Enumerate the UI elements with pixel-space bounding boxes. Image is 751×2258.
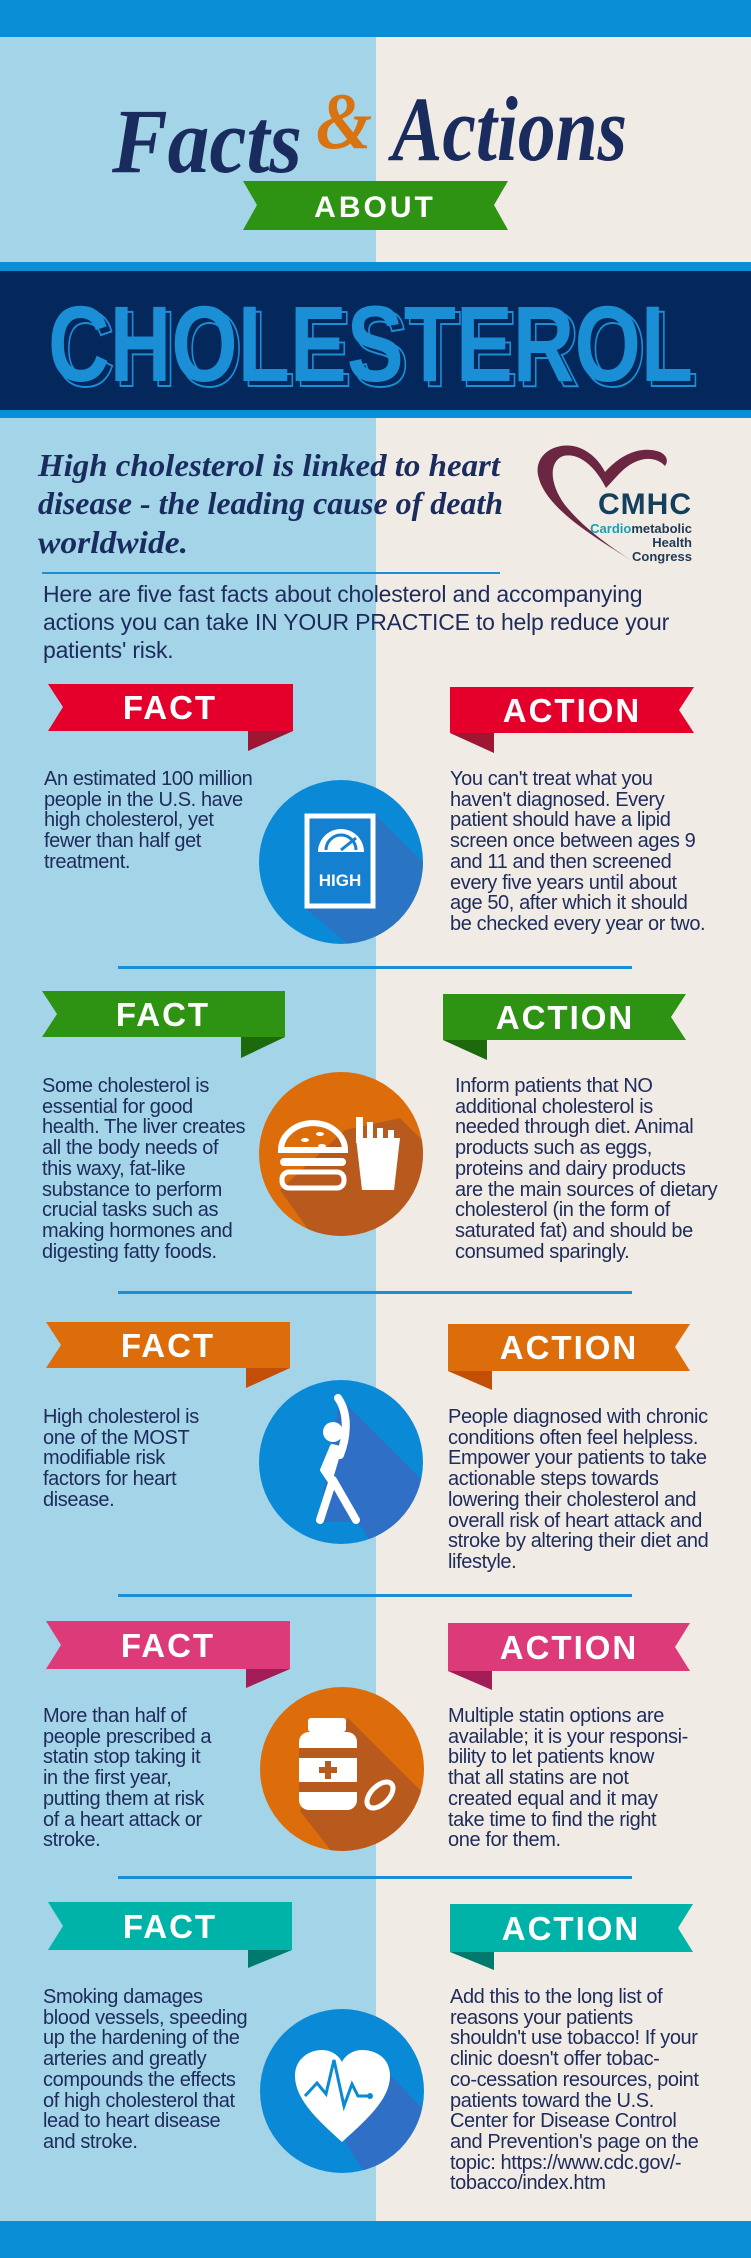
banners section 3 [46,1322,290,1388]
banners section 5: FACT [123,1908,217,1945]
action 4 text: Multiple statin options are [448,1705,664,1727]
about banner: ABOUT [314,191,436,224]
action 5 text: topic: https://www.cdc.gov/- [450,2152,681,2174]
action 5 text: clinic doesn't offer tobac- [450,2048,659,2070]
action 1 text: patient should have a lipid [450,809,670,831]
fact 2 text: this waxy, fat-like [42,1158,185,1180]
text: ACTION [496,999,634,1036]
fact 5 text: Smoking damages [43,1986,203,2008]
banners section 4 [46,1621,290,1688]
text: ACTION [502,1910,640,1947]
title: Facts [111,90,302,192]
fact 5 text: of high cholesterol that [43,2090,235,2112]
banners section 4: FACT [121,1627,215,1664]
fact 4 text: statin stop taking it [43,1746,200,1768]
tagline: worldwide. [38,524,188,560]
fact 4 text [43,1705,212,1851]
fact 1 text: treatment. [44,851,130,873]
dividers [118,966,632,1879]
action 2 text: saturated fat) and should be [455,1220,693,1242]
fact 3 text: disease. [43,1489,114,1511]
about banner [243,181,508,230]
fact 3 text: one of the MOST [43,1427,189,1449]
action 5 text: Center for Disease Control [450,2110,676,2132]
title: Actions [388,78,627,180]
action 4 text: bility to let patients know [448,1746,654,1768]
action 3 text: conditions often feel helpless. [448,1427,698,1449]
banners section 2: FACT [116,996,210,1033]
fact 4 text: of a heart attack or [43,1809,202,1831]
text: ACTION [500,1629,638,1666]
action 2 text: needed through diet. Animal [455,1116,693,1138]
action 2 text: cholesterol (in the form of [455,1199,670,1221]
action 1 text: and 11 and then screened [450,851,671,873]
tagline: High cholesterol is linked to heart [37,447,501,483]
fact 5 text: compounds the effects [43,2069,235,2091]
action 4 text: created equal and it may [448,1788,657,1810]
fact 3 text: High cholesterol is [43,1406,199,1428]
action 4 text: one for them. [448,1829,561,1851]
icon: stretching person [259,1380,423,1544]
icon: burger and fries [259,1072,423,1236]
action 1 text: be checked every year or two. [450,913,705,935]
fact 2 text [42,1075,245,1263]
fact 5 text: arteries and greatly [43,2048,206,2070]
fact 5 text: up the hardening of the [43,2027,240,2049]
title: & [316,78,372,166]
fact 1 text: fewer than half get [44,830,201,852]
intro text: Here are five fast facts about cholesterol and accompanying [43,581,642,607]
fact 2 text: essential for good [42,1096,193,1118]
fact 4 text: More than half of [43,1705,186,1727]
action 5 text: shouldn't use tobacco! If your [450,2027,698,2049]
text: ACTION [503,692,641,729]
action 5 text: tobacco/index.htm [450,2172,606,2194]
action 5 text: patients toward the U.S. [450,2090,654,2112]
fact 2 text: all the body needs of [42,1137,218,1159]
banners section 1 [48,684,293,751]
icon: pill bottle [260,1687,424,1851]
action 5 text: co-cessation resources, point [450,2069,699,2091]
title [111,78,627,192]
action 2 text: products such as eggs, [455,1137,652,1159]
action 1 text: age 50, after which it should [450,892,687,914]
banners section 2 [42,991,285,1058]
logo [538,446,692,566]
tagline [37,447,503,560]
icon: heart ecg [260,2009,424,2173]
action 4 text: available; it is your responsi- [448,1726,688,1748]
fact 1 text: high cholesterol, yet [44,809,213,831]
action 5 text [450,1986,699,2194]
action 3 text: People diagnosed with chronic [448,1406,708,1428]
text: ACTION [500,1329,638,1366]
action 3 text [448,1406,708,1573]
banners section 5 [48,1902,292,1968]
action 5 text: reasons your patients [450,2007,633,2029]
action 5 text: Add this to the long list of [450,1986,662,2008]
fact 4 text: putting them at risk [43,1788,204,1810]
action 4 text: that all statins are not [448,1767,629,1789]
action 1 text: every five years until about [450,872,677,894]
fact 1 text [44,768,252,873]
logo: Congress [632,549,692,564]
tagline: disease - the leading cause of death [38,485,503,521]
banners section 1: FACT [123,689,217,726]
action 3 text: Empower your patients to take [448,1447,707,1469]
action 5 text: and Prevention's page on the [450,2131,698,2153]
fact 1 text: An estimated 100 million [44,768,252,790]
action 2 text: additional cholesterol is [455,1096,653,1118]
action 3 text: lowering their cholesterol and [448,1489,696,1511]
action 1 text [450,768,705,935]
action 2 text: proteins and dairy products [455,1158,685,1180]
fact 2 text: substance to perform [42,1179,222,1201]
logo: CMHC [598,488,692,521]
action 1 text: haven't diagnosed. Every [450,789,664,811]
logo: Health [652,535,692,550]
intro text: patients' risk. [43,637,174,663]
fact 2 text: health. The liver creates [42,1116,245,1138]
banners section 3: FACT [121,1327,215,1364]
action 4 text [448,1705,688,1851]
fact 2 text: crucial tasks such as [42,1199,218,1221]
fact 3 text: factors for heart [43,1468,176,1490]
action 2 text [455,1075,718,1263]
fact 5 text: and stroke. [43,2131,138,2153]
fact 5 text: lead to heart disease [43,2110,220,2132]
action 4 text: take time to find the right [448,1809,656,1831]
icon: high meter: HIGH [319,871,361,890]
action 3 text: lifestyle. [448,1551,516,1573]
action 3 text: actionable steps towards [448,1468,659,1490]
action 2 text: are the main sources of dietary [455,1179,717,1201]
fact 5 text: blood vessels, speeding [43,2007,247,2029]
fact 4 text: people prescribed a [43,1726,211,1748]
action 3 text: overall risk of heart attack and [448,1510,702,1532]
icon: high meter [259,780,423,944]
fact 3 text [43,1406,199,1511]
fact 1 text: people in the U.S. have [44,789,243,811]
fact 2 text: Some cholesterol is [42,1075,209,1097]
fact 2 text: making hormones and [42,1220,232,1242]
fact 4 text: in the first year, [43,1767,171,1789]
action 3 text: stroke by altering their diet and [448,1530,708,1552]
intro text [43,581,669,663]
fact 3 text: modifiable risk [43,1447,165,1469]
fact 2 text: digesting fatty foods. [42,1241,217,1263]
intro text: actions you can take IN YOUR PRACTICE to help reduce your [43,609,669,635]
action 1 text: screen once between ages 9 [450,830,695,852]
fact 4 text: stroke. [43,1829,100,1851]
fact 5 text [43,1986,247,2153]
logo: Cardiometabolic [590,521,692,536]
action 2 text: consumed sparingly. [455,1241,629,1263]
action 2 text: Inform patients that NO [455,1075,653,1097]
action 1 text: You can't treat what you [450,768,653,790]
